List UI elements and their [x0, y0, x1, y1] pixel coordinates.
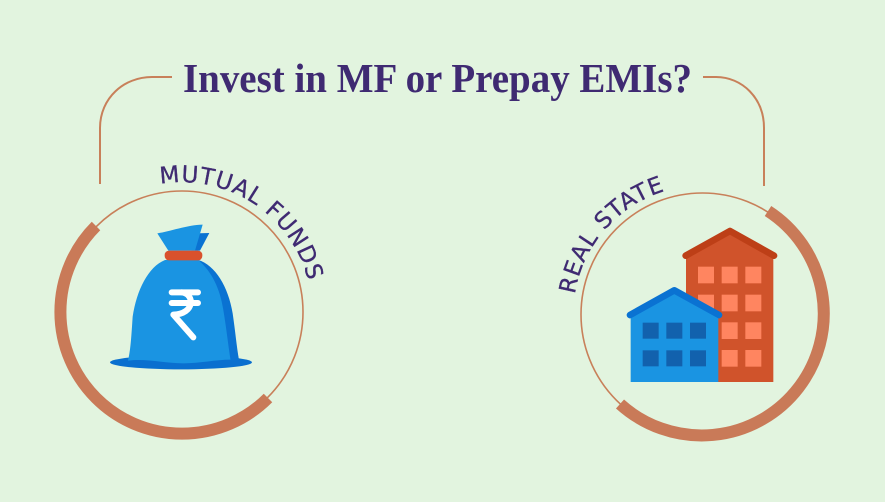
icon: buildings	[630, 231, 774, 382]
title: Invest in MF or Prepay EMIs?	[183, 55, 692, 101]
panel: real state	[558, 176, 830, 442]
thin ring: real state	[581, 193, 824, 436]
thick arc: mutual funds	[60, 226, 268, 434]
curved label: real state: REAL STATE	[558, 176, 664, 292]
panel: mutual funds	[54, 165, 324, 440]
icon: money bag with rupee	[110, 225, 252, 369]
connector line: right	[703, 77, 764, 186]
curved label: mutual funds: MUTUAL FUNDS	[160, 165, 324, 278]
thick arc: real state	[620, 211, 824, 435]
thin ring: mutual funds	[61, 191, 303, 433]
connector line: left	[100, 77, 172, 184]
